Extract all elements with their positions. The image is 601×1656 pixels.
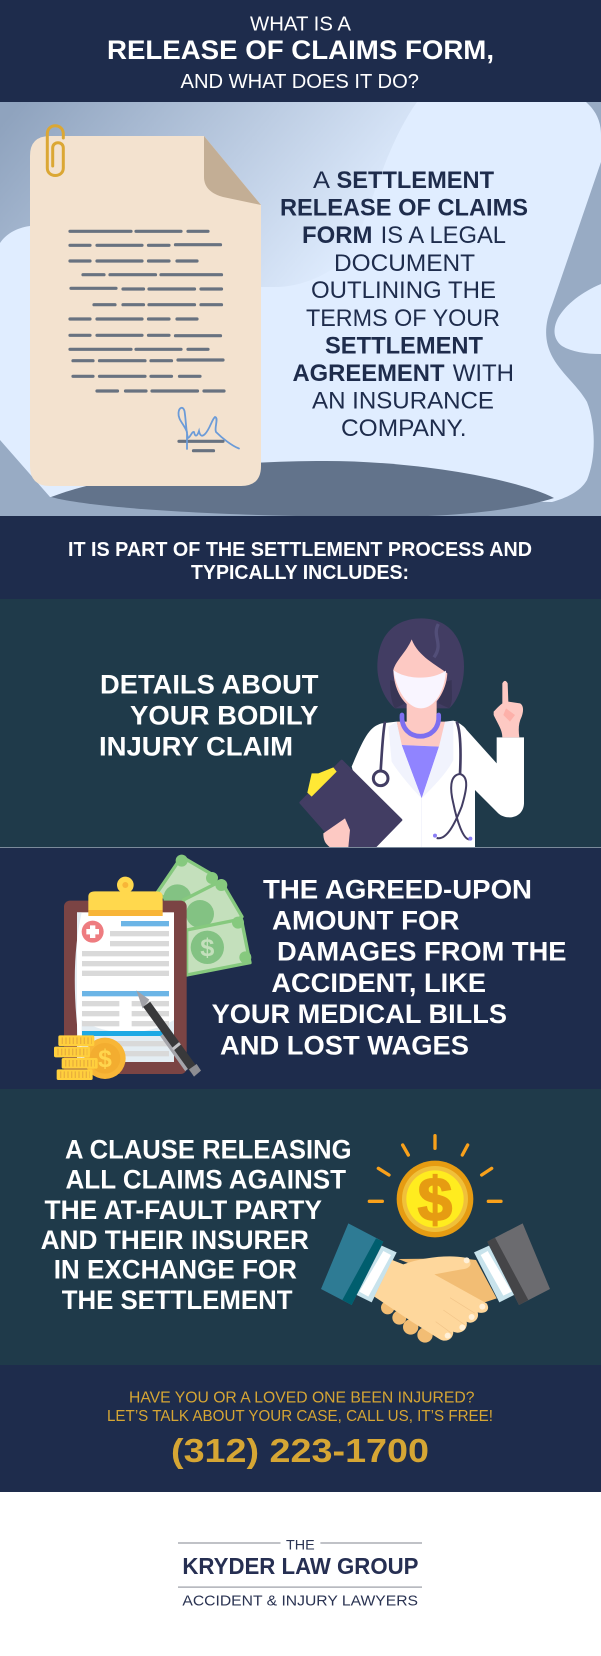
definition text: AN INSURANCE <box>312 388 494 415</box>
cta text <box>107 1390 493 1425</box>
text: bodily injury: DETAILS ABOUT <box>100 670 318 700</box>
logo: THE <box>286 1536 315 1552</box>
title line 3: AND WHAT DOES IT DO? <box>180 71 419 93</box>
text: agreed amount: YOUR MEDICAL BILLS <box>212 999 507 1029</box>
definition text: OUTLINING THE <box>311 277 496 304</box>
text: release clause: THE SETTLEMENT <box>62 1285 293 1315</box>
panel: release clause <box>0 1089 601 1366</box>
title line 2: RELEASE OF CLAIMS FORM, <box>107 35 494 65</box>
text: bodily injury: YOUR BODILY <box>130 700 319 730</box>
icon: handshake with coin <box>321 1136 550 1343</box>
text: release clause: IN EXCHANGE FOR <box>54 1255 297 1285</box>
cta text: LET’S TALK ABOUT YOUR CASE, CALL US, IT’S FREE! <box>107 1408 493 1425</box>
title line 1: WHAT IS A <box>250 14 352 36</box>
definition text: AGREEMENT <box>292 360 445 387</box>
text: release clause: A CLAUSE RELEASING <box>65 1135 352 1165</box>
icon: document <box>30 126 261 486</box>
icon: clipboard with money and coins: $ <box>200 934 214 962</box>
text: agreed amount: ACCIDENT, LIKE <box>271 968 486 998</box>
text: bodily injury: INJURY CLAIM <box>99 732 293 762</box>
panel: definition hero <box>0 102 601 517</box>
ground shadow <box>51 461 554 517</box>
header panel <box>0 0 601 102</box>
text: release clause: THE AT-FAULT PARTY <box>44 1195 322 1225</box>
text: agreed amount: DAMAGES FROM THE <box>277 937 566 967</box>
definition text: FORM <box>302 222 372 249</box>
definition text <box>280 167 528 442</box>
definition text: IS A LEGAL <box>381 222 506 249</box>
logo: KRYDER LAW GROUP <box>182 1553 418 1579</box>
icon: signature <box>178 408 239 449</box>
definition text: A <box>313 167 330 194</box>
text: release clause: ALL CLAIMS AGAINST <box>66 1165 346 1195</box>
icon: handshake with coin: $ <box>418 1166 452 1235</box>
logo <box>178 1536 422 1610</box>
logo: ACCIDENT & INJURY LAWYERS <box>182 1594 418 1610</box>
text: release clause: AND THEIR INSURER <box>41 1225 309 1255</box>
definition text: SETTLEMENT <box>325 333 483 360</box>
definition text: RELEASE OF CLAIMS <box>280 195 528 222</box>
panel: agreed amount <box>0 848 601 1089</box>
text: agreed amount: THE AGREED-UPON <box>263 875 532 905</box>
panel: bodily injury <box>0 599 601 848</box>
phone number: (312) 223-1700 <box>171 1432 429 1469</box>
text: agreed amount: AMOUNT FOR <box>272 906 460 936</box>
definition text: COMPANY. <box>341 415 466 442</box>
panel: intro band <box>0 516 601 599</box>
intro text: IT IS PART OF THE SETTLEMENT PROCESS AND <box>68 539 532 561</box>
definition text: SETTLEMENT <box>336 167 494 194</box>
definition text: TERMS OF YOUR <box>306 305 500 332</box>
text: release clause <box>41 1135 351 1315</box>
definition text: WITH <box>453 360 514 387</box>
definition text: DOCUMENT <box>334 250 475 277</box>
icon: paperclip <box>47 126 63 176</box>
text: agreed amount <box>212 875 566 1060</box>
intro text <box>68 539 532 584</box>
icon: clipboard with money and coins: $ <box>98 1046 112 1073</box>
cta text: HAVE YOU OR A LOVED ONE BEEN INJURED? <box>129 1390 475 1407</box>
text: agreed amount: AND LOST WAGES <box>220 1030 469 1060</box>
icon: doctor <box>301 618 524 847</box>
intro text: TYPICALLY INCLUDES: <box>191 562 409 584</box>
icon: clipboard with money and coins <box>54 855 251 1080</box>
panel: call to action <box>0 1365 601 1492</box>
text: bodily injury <box>99 670 319 762</box>
